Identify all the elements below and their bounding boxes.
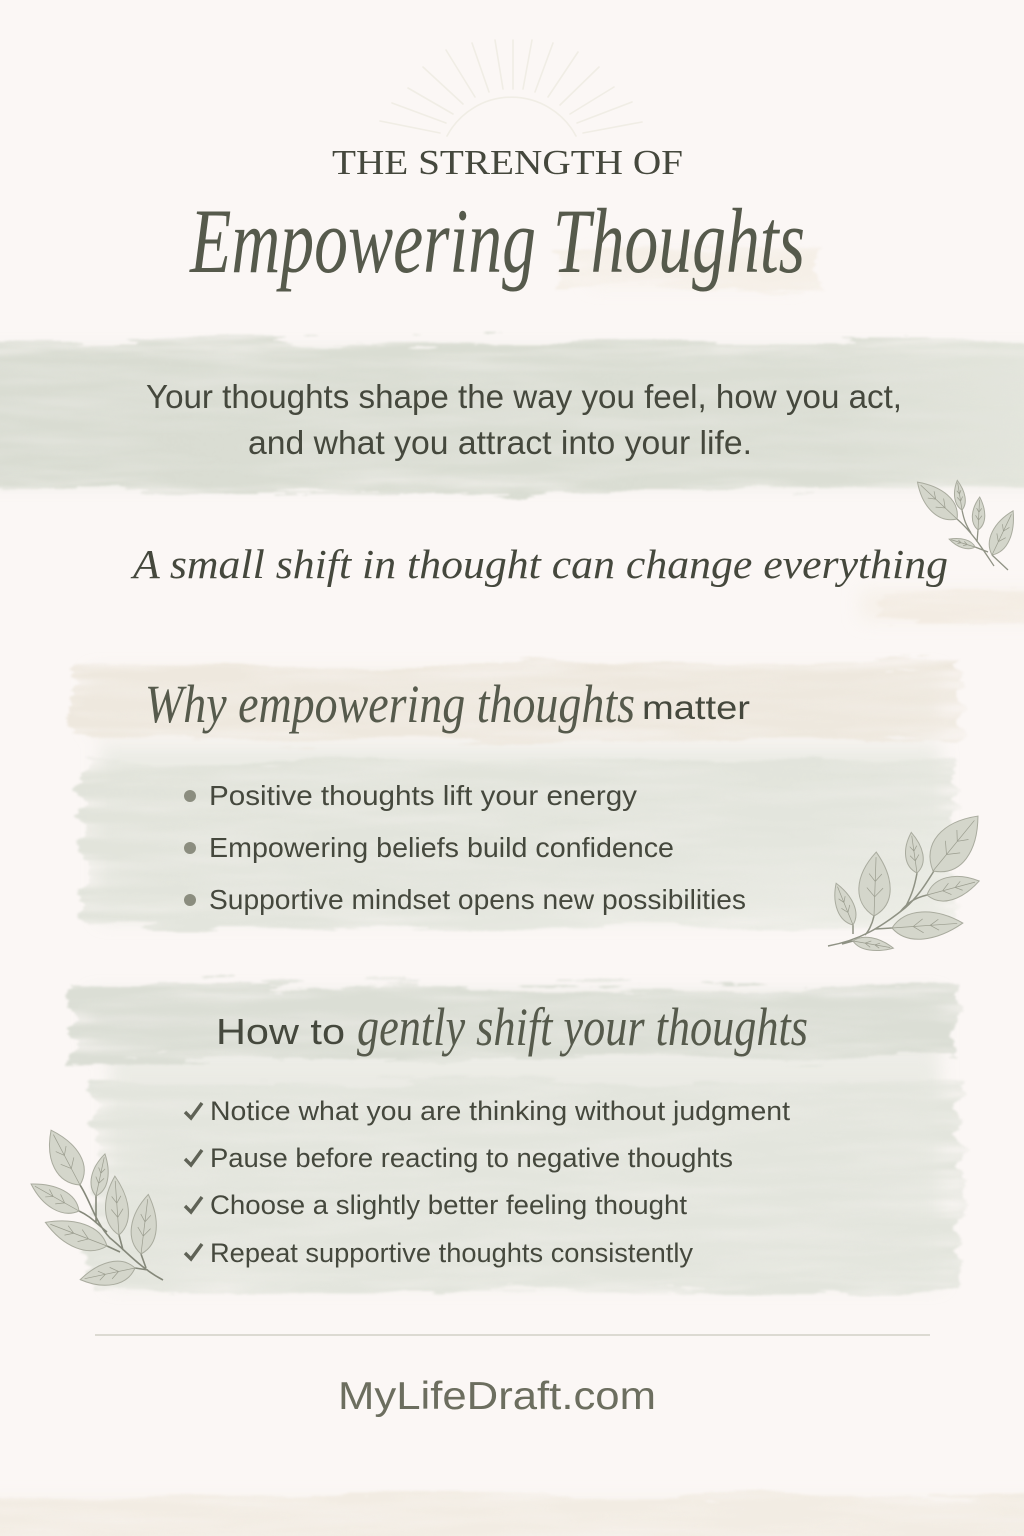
checklist bbox=[185, 1096, 791, 1268]
bullet list: Supportive mindset opens new possibilities bbox=[209, 884, 746, 915]
bullet list: Positive thoughts lift your energy bbox=[209, 780, 637, 811]
heading bbox=[216, 997, 808, 1057]
intro statement: and what you attract into your life. bbox=[248, 424, 752, 461]
checklist: Notice what you are thinking without judgment bbox=[210, 1096, 791, 1126]
heading: gently shift your thoughts bbox=[357, 997, 808, 1057]
checklist: Choose a slightly better feeling thought bbox=[210, 1190, 688, 1220]
title: THE STRENGTH OF bbox=[332, 143, 683, 182]
icon: middle right leaf sprig bbox=[828, 804, 992, 954]
checklist: Repeat supportive thoughts consistently bbox=[210, 1238, 693, 1268]
bullet list: Empowering beliefs build confidence bbox=[209, 832, 674, 863]
heading: Why empowering thoughts bbox=[145, 674, 635, 734]
tagline: A small shift in thought can change everything bbox=[130, 541, 948, 587]
intro statement bbox=[146, 378, 902, 461]
icon: lower left leaf sprig bbox=[26, 1124, 163, 1291]
icon: rising sun bbox=[380, 40, 642, 136]
heading: matter bbox=[642, 689, 750, 726]
checklist: Pause before reacting to negative thoughts bbox=[210, 1143, 733, 1173]
intro statement: Your thoughts shape the way you feel, how you act, bbox=[146, 378, 902, 415]
footer website: MyLifeDraft.com bbox=[338, 1375, 656, 1418]
icon: top right leaf sprig bbox=[910, 474, 1021, 570]
bullet list bbox=[184, 780, 746, 915]
title bbox=[189, 143, 805, 292]
title: Empowering Thoughts bbox=[189, 190, 805, 292]
panel: how to gently shift your thoughts bbox=[185, 997, 808, 1268]
heading: How to bbox=[216, 1011, 345, 1052]
panel: why empowering thoughts matter bbox=[145, 674, 750, 915]
